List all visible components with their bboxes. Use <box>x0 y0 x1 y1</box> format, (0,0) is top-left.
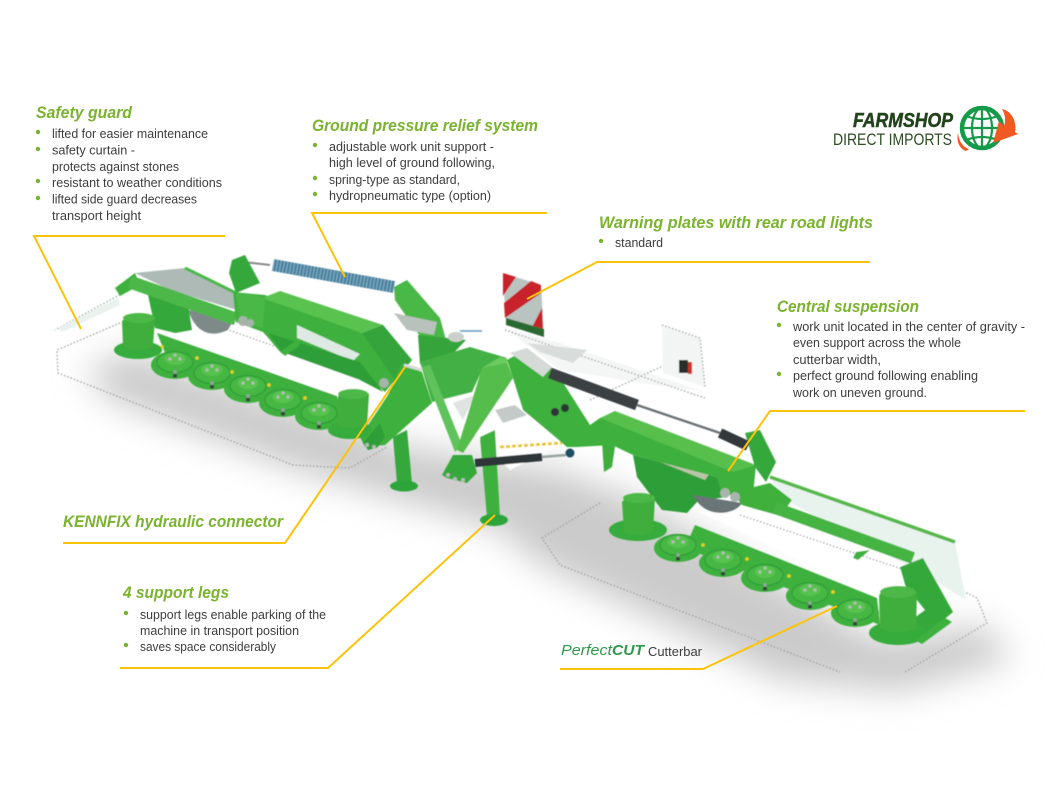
text block: safety guard: Safety guard <box>36 103 133 122</box>
right frame body <box>507 348 633 455</box>
text block: warning plates: Warning plates with rear road lights <box>599 213 873 232</box>
text block: ground pressure relief system: hydropneumatic type (option) <box>329 189 491 203</box>
text block: 4 support legs: saves space considerably <box>140 640 277 654</box>
right upper tube <box>775 508 913 560</box>
text block: 4 support legs: machine in transport position <box>140 624 299 638</box>
text block: central suspension: work unit located in the center of gravity - <box>792 320 1025 334</box>
logo: Farmshop Direct Imports <box>833 108 1018 151</box>
text block: central suspension: Central suspension <box>777 297 919 316</box>
text block: ground pressure relief system <box>312 116 538 203</box>
text block: safety guard <box>36 103 222 223</box>
chain and top link <box>475 443 574 463</box>
right rear glass guard <box>770 477 966 600</box>
spring left bracket <box>229 255 260 293</box>
heading: KENNFIX hydraulic connector: KENNFIX hydraulic connector <box>63 512 284 531</box>
text block: central suspension: perfect ground following enabling <box>793 369 978 383</box>
left gray guard <box>135 268 237 334</box>
spring <box>243 262 394 287</box>
label: PerfectCUT Cutterbar: CUT <box>612 642 646 659</box>
text block: warning plates: standard <box>615 236 663 250</box>
right gearbox bracket <box>633 450 742 513</box>
text block: 4 support legs <box>122 583 326 654</box>
icon: globe with arrow <box>957 108 1018 151</box>
text block: ground pressure relief system: spring-type as standard, <box>329 173 460 187</box>
text block: central suspension <box>777 297 1025 400</box>
left gearbox bracket <box>147 290 192 333</box>
text block: safety guard: protects against stones <box>52 160 179 174</box>
text block: warning plates <box>599 213 873 250</box>
text block: ground pressure relief system: high level of ground following, <box>329 156 495 170</box>
hydraulic cylinder <box>550 373 748 446</box>
logo: Farmshop Direct Imports: DIRECT IMPORTS <box>833 131 952 149</box>
support leg left <box>390 430 418 492</box>
text block: safety guard: resistant to weather conditions <box>52 176 222 190</box>
right frame arm <box>600 411 756 495</box>
right end bracket <box>900 558 953 642</box>
left cutterbar <box>114 313 372 439</box>
right cutterbar <box>609 493 952 645</box>
support leg center <box>480 430 508 526</box>
logo: Farmshop Direct Imports: FARMSHOP <box>853 110 954 132</box>
left upper tube <box>115 273 236 319</box>
text block: central suspension: work on uneven ground. <box>792 386 927 400</box>
spring right arm <box>394 280 482 364</box>
label: PerfectCUT Cutterbar <box>561 642 702 659</box>
hex bracket and connector <box>720 430 792 516</box>
control panel <box>662 325 705 387</box>
text block: central suspension: cutterbar width, <box>793 353 881 367</box>
mower machine <box>55 255 987 672</box>
white clearing between frame and cutterbar <box>175 325 925 600</box>
text block: safety guard: transport height <box>52 209 142 223</box>
text block: 4 support legs: support legs enable parking of the <box>140 608 326 622</box>
text block: 4 support legs: 4 support legs <box>122 583 229 602</box>
text block: safety guard: safety curtain - <box>52 144 135 158</box>
leader lines <box>34 213 1025 669</box>
text block: safety guard: lifted side guard decreases <box>52 192 197 206</box>
ground shadow <box>85 350 1012 692</box>
label: PerfectCUT Cutterbar: Cutterbar <box>648 645 702 659</box>
left main beam <box>233 291 412 392</box>
right dotted guard outline <box>542 503 987 672</box>
label: PerfectCUT Cutterbar: Perfect <box>561 642 613 659</box>
glass guard at center <box>505 328 705 400</box>
text block: ground pressure relief system: Ground pressure relief system <box>312 116 538 135</box>
text block: central suspension: even support across the whole <box>793 336 961 350</box>
central frame <box>360 347 513 483</box>
text block: safety guard: lifted for easier maintenance <box>52 127 208 141</box>
warning plate <box>503 273 544 337</box>
support leg right <box>602 440 616 472</box>
left dotted guard outline <box>55 293 387 468</box>
text block: ground pressure relief system: adjustable work unit support - <box>329 140 494 154</box>
gearbox behind central frame <box>453 343 587 423</box>
